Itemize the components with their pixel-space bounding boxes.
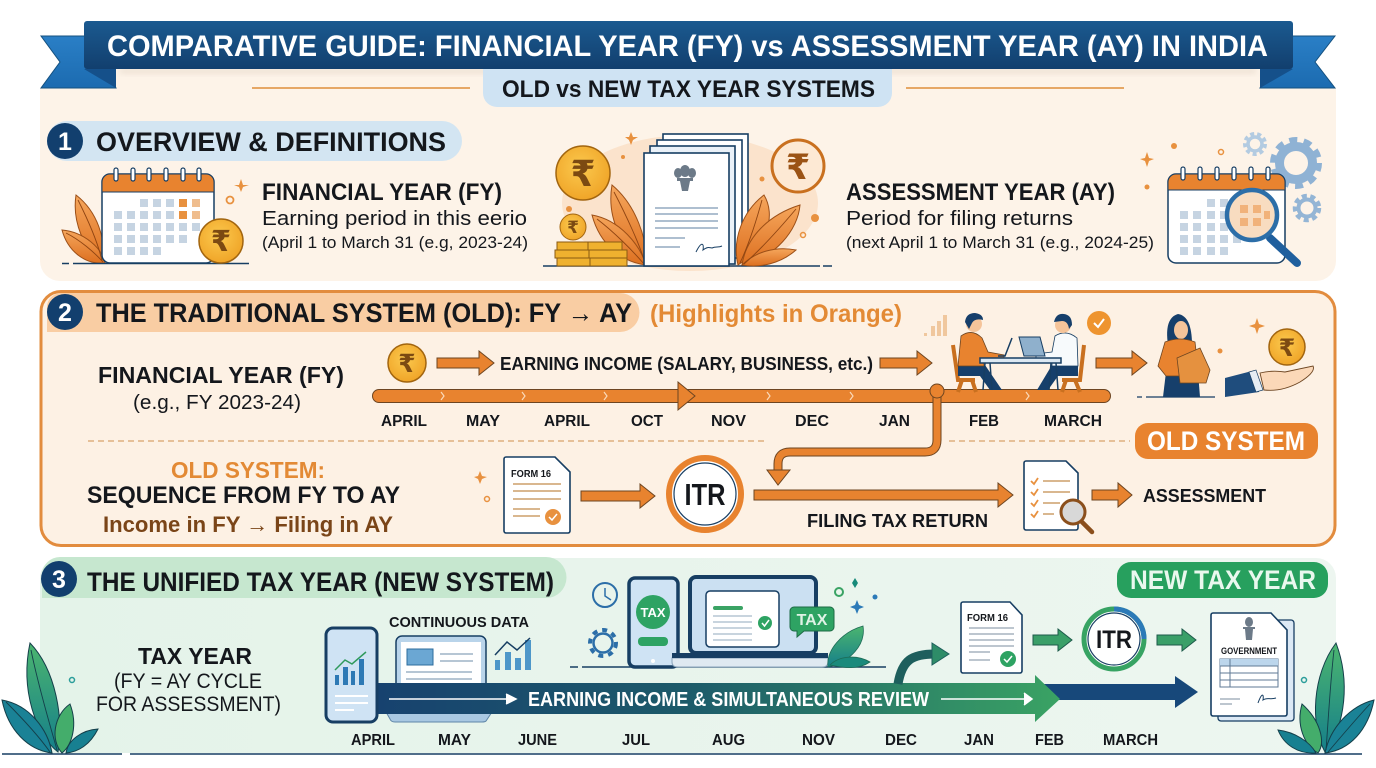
arrow: form 16 to ITR bbox=[581, 484, 655, 508]
front sheet bbox=[644, 153, 729, 266]
sparks bbox=[1140, 143, 1177, 190]
signature bbox=[1258, 695, 1276, 703]
heading pill bbox=[47, 121, 462, 161]
leaves bbox=[828, 626, 870, 668]
sleeve bbox=[1225, 371, 1259, 397]
table head bbox=[1220, 659, 1278, 666]
arrow: form 16 to ITR green bbox=[1033, 629, 1072, 651]
example: (e.g., FY 2023-24) bbox=[133, 392, 301, 414]
illustration: laptop with continuous data bbox=[386, 614, 531, 722]
screen bbox=[401, 642, 481, 692]
badge pill bbox=[1117, 562, 1328, 598]
day grid bbox=[1180, 199, 1241, 255]
illustration: two people at a desk bbox=[924, 311, 1111, 392]
badge text: NEW TAX YEAR bbox=[1130, 565, 1316, 595]
dots bbox=[566, 132, 819, 222]
heading pill bbox=[42, 557, 566, 598]
section 1 heading bbox=[47, 121, 462, 161]
badge: old system bbox=[1135, 423, 1318, 459]
heading text: THE UNIFIED TAX YEAR (NEW SYSTEM) bbox=[87, 567, 554, 597]
green button bbox=[638, 637, 668, 646]
arrow: ITR to assessment document bbox=[754, 483, 1013, 507]
rupee: ₹ bbox=[398, 350, 416, 378]
lines bbox=[969, 628, 1014, 660]
lines bbox=[1043, 481, 1070, 514]
inner ring bbox=[674, 463, 736, 525]
tall leaf bbox=[27, 643, 60, 752]
arrow: to assessment bbox=[1092, 483, 1132, 507]
cycle: (FY = AY CYCLE bbox=[114, 670, 262, 693]
spark bbox=[1249, 318, 1265, 334]
illustration: phone and laptop tax filing bbox=[570, 577, 886, 668]
window lines bbox=[713, 616, 752, 640]
tax circle bbox=[636, 595, 670, 629]
month labels: old system bbox=[381, 413, 1102, 430]
april again: APRIL bbox=[544, 413, 590, 430]
right chair bbox=[1062, 345, 1084, 392]
right leaf bbox=[66, 729, 98, 753]
peach glow bbox=[562, 135, 818, 271]
rings bbox=[1181, 167, 1270, 180]
arrow: meeting to payment bbox=[1096, 351, 1147, 375]
heading text: OVERVIEW & DEFINITIONS bbox=[96, 127, 446, 157]
AY heading: ASSESSMENT YEAR (AY) bbox=[846, 179, 1115, 206]
bubble label: TAX bbox=[797, 612, 828, 629]
icon: rupee coin bbox=[388, 344, 426, 382]
check bbox=[1000, 651, 1016, 667]
icon: ITR ring green bbox=[1084, 609, 1144, 669]
back sheets bbox=[650, 134, 748, 264]
gradient arrow bbox=[377, 675, 1060, 722]
ring bbox=[70, 678, 74, 682]
ground line bbox=[570, 666, 886, 668]
calendar header bbox=[102, 174, 214, 192]
sheet bbox=[1024, 461, 1078, 530]
veins bbox=[6, 650, 57, 752]
check mark bbox=[1094, 319, 1104, 327]
form label: FORM 16 bbox=[967, 613, 1008, 624]
arrow: to meeting bbox=[880, 351, 932, 375]
cuff bbox=[1249, 370, 1263, 392]
ring bbox=[1302, 678, 1306, 682]
outline coin rupee: ₹ bbox=[786, 148, 810, 187]
outline coin bbox=[772, 140, 824, 192]
number badge bbox=[47, 123, 83, 159]
number: 2 bbox=[58, 299, 72, 327]
text block: sequence bbox=[87, 457, 400, 537]
icon: calendar with magnifier and gears bbox=[1140, 134, 1319, 263]
calendar body bbox=[102, 174, 214, 263]
window bbox=[706, 591, 779, 647]
subtitle ribbon bbox=[252, 69, 1124, 107]
white arrow left bbox=[389, 694, 516, 704]
main arrow: earning income and review bbox=[377, 675, 1198, 722]
ground line bbox=[2, 753, 1362, 755]
june: JUNE bbox=[518, 732, 557, 749]
emblem bbox=[1243, 617, 1255, 640]
jul: JUL bbox=[622, 732, 650, 749]
clock bbox=[593, 583, 617, 607]
connector outline bbox=[778, 392, 937, 472]
navy tail arrow bbox=[1040, 676, 1198, 708]
chart bars bbox=[335, 659, 364, 685]
signature bbox=[696, 244, 722, 252]
panel: overview background bbox=[40, 69, 1336, 281]
dec: DEC bbox=[795, 413, 829, 430]
laptop base bbox=[672, 658, 828, 667]
section 2 heading bbox=[47, 293, 902, 332]
icon: checklist with magnifier bbox=[1024, 461, 1092, 532]
middle leaf bbox=[1300, 704, 1321, 753]
panel: traditional system bbox=[41, 292, 1335, 546]
badge pill bbox=[1135, 423, 1318, 459]
ribbon tail left bbox=[41, 36, 116, 88]
phone body bbox=[326, 628, 377, 722]
dec: DEC bbox=[885, 732, 917, 749]
icon: phone with chart bbox=[326, 628, 377, 722]
far right leaf bbox=[1325, 700, 1374, 753]
back sheet bbox=[1218, 620, 1294, 721]
left chair bbox=[953, 345, 976, 392]
footer lines bbox=[1220, 699, 1240, 704]
right person legs bbox=[1037, 365, 1078, 390]
label: EARNING INCOME & SIMULTANEOUS REVIEW bbox=[528, 689, 929, 711]
ring base bbox=[1084, 609, 1144, 669]
right person torso bbox=[1036, 333, 1078, 366]
check mark bbox=[549, 514, 557, 520]
coin bbox=[1269, 329, 1305, 365]
right person head bbox=[1055, 317, 1071, 333]
veins bbox=[1326, 650, 1370, 752]
curve head bbox=[932, 643, 949, 665]
right person hair bbox=[1054, 314, 1072, 329]
bar bbox=[372, 390, 1110, 402]
check badge bbox=[545, 509, 561, 525]
torso bbox=[1158, 339, 1199, 376]
left leaf bbox=[1278, 730, 1316, 753]
ground line bbox=[62, 262, 249, 264]
subtitle rule left bbox=[252, 87, 470, 89]
arrow: to earning income bbox=[437, 351, 494, 375]
small ring bbox=[226, 196, 234, 204]
connector fill bbox=[778, 392, 937, 472]
hair bbox=[1167, 314, 1192, 345]
feb: FEB bbox=[969, 413, 999, 430]
big coin bbox=[556, 146, 610, 200]
spark bbox=[474, 471, 487, 484]
chat check bbox=[1087, 311, 1111, 335]
plant: right bbox=[1278, 643, 1374, 753]
ITR text: ITR bbox=[684, 477, 726, 512]
form label: FORM 16 bbox=[511, 469, 551, 480]
icon: form 16 document bbox=[474, 457, 570, 533]
label: OLD SYSTEM: bbox=[171, 457, 325, 483]
highlight note: (Highlights in Orange) bbox=[650, 300, 902, 328]
top gear bbox=[1245, 134, 1265, 154]
lens cells bbox=[1240, 205, 1270, 226]
illustration: hand receiving coin bbox=[1218, 318, 1313, 397]
sparks bbox=[850, 578, 878, 614]
small coin rupee: ₹ bbox=[567, 218, 579, 237]
number: 3 bbox=[52, 566, 66, 594]
may: MAY bbox=[438, 732, 471, 749]
arrow: curved to form 16 bbox=[898, 643, 949, 684]
text block: tax year bbox=[96, 643, 281, 716]
ribbon folds bbox=[84, 69, 1293, 88]
arrow: connector from FY to AY bbox=[767, 384, 944, 485]
illustration: woman with folder bbox=[1137, 314, 1215, 397]
AY description: Period for filing returns bbox=[846, 208, 1073, 230]
laptop deck bbox=[672, 653, 828, 658]
nov: NOV bbox=[711, 413, 746, 430]
left laptop bbox=[998, 338, 1012, 356]
ring blue arc bbox=[1114, 609, 1144, 639]
badge: new tax year bbox=[1117, 562, 1328, 598]
curve bbox=[898, 654, 935, 684]
coin bbox=[388, 344, 426, 382]
hand bbox=[1260, 366, 1313, 390]
rupee: ₹ bbox=[1279, 335, 1295, 362]
feb: FEB bbox=[1035, 732, 1064, 749]
tall leaf bbox=[1315, 643, 1344, 752]
table bbox=[980, 358, 1061, 390]
ring bbox=[835, 588, 843, 596]
mid arrowhead bbox=[678, 382, 695, 410]
label: CONTINUOUS DATA bbox=[389, 614, 529, 631]
AY dates: (next April 1 to March 31 (e.g., 2024-25) bbox=[846, 233, 1154, 252]
middle leaf bbox=[55, 704, 74, 753]
ribbon tail right bbox=[1260, 36, 1335, 88]
jan: JAN bbox=[879, 413, 910, 430]
icon: form 16 document green bbox=[961, 602, 1022, 673]
folder bbox=[1177, 348, 1210, 383]
icon: document stack with coins bbox=[543, 132, 832, 271]
left leaves bbox=[592, 185, 646, 265]
april: APRIL bbox=[351, 732, 395, 749]
icon: government document bbox=[1211, 613, 1294, 721]
bars bbox=[924, 315, 947, 336]
plant: left bbox=[2, 643, 98, 753]
right leaves bbox=[736, 195, 800, 266]
spark bbox=[234, 179, 249, 192]
icon: ITR ring bbox=[669, 458, 741, 530]
subtitle text: OLD vs NEW TAX YEAR SYSTEMS bbox=[502, 76, 875, 103]
right laptop bbox=[1019, 337, 1045, 356]
calendar header bbox=[1168, 174, 1285, 190]
ground line bbox=[1137, 396, 1215, 398]
gear bbox=[590, 630, 616, 656]
section 3 heading bbox=[41, 557, 566, 598]
march: MARCH bbox=[1044, 413, 1102, 430]
text: assessment: ASSESSMENT bbox=[1143, 486, 1266, 506]
title banner bbox=[41, 21, 1335, 88]
subtitle rule right bbox=[906, 87, 1124, 89]
sequence: SEQUENCE FROM FY TO AY bbox=[87, 482, 400, 509]
chevrons bbox=[441, 392, 1029, 400]
magnifier handle bbox=[1270, 238, 1297, 263]
table rules bbox=[1220, 659, 1278, 687]
aug: AUG bbox=[712, 732, 745, 749]
check mark bbox=[1004, 656, 1012, 662]
text: filing tax return: FILING TAX RETURN bbox=[807, 511, 988, 531]
month labels: new system bbox=[351, 732, 1158, 749]
tax circle label: TAX bbox=[640, 605, 666, 620]
nov: NOV bbox=[802, 732, 835, 749]
ring bbox=[484, 496, 490, 502]
left person torso bbox=[958, 332, 1004, 366]
window accent bbox=[713, 606, 743, 610]
rupee: ₹ bbox=[211, 226, 231, 258]
dots bbox=[1218, 348, 1222, 354]
emblem bbox=[674, 165, 696, 191]
panel: unified tax year bbox=[40, 558, 1336, 753]
number badge bbox=[41, 561, 77, 597]
laptop frame bbox=[396, 636, 486, 696]
leaves bbox=[62, 195, 105, 263]
skirt bbox=[1163, 372, 1200, 397]
home button bbox=[651, 659, 655, 663]
text block: FY label bbox=[98, 362, 344, 414]
number: 1 bbox=[58, 128, 72, 156]
text block: assessment year bbox=[846, 179, 1154, 252]
government label: GOVERNMENT bbox=[1221, 646, 1277, 656]
white arrow right bbox=[941, 693, 1032, 705]
march: MARCH bbox=[1103, 732, 1158, 749]
left person head bbox=[966, 316, 982, 332]
coin bbox=[199, 219, 243, 263]
lines bbox=[335, 696, 368, 710]
label: TAX YEAR bbox=[138, 643, 252, 669]
left leaf veins bbox=[597, 192, 645, 264]
arrow: ITR to government bbox=[1157, 629, 1196, 651]
ring bbox=[800, 232, 806, 238]
FY description: Earning period in this eerio bbox=[262, 208, 527, 230]
heading pill bbox=[47, 293, 639, 332]
front sheet bbox=[1211, 613, 1287, 716]
income to filing: Income in FY → Filing in AY bbox=[103, 512, 393, 537]
small coin bbox=[560, 214, 586, 240]
magnifier lens bbox=[1227, 190, 1277, 240]
assessment: FOR ASSESSMENT) bbox=[96, 693, 281, 716]
sheet bbox=[504, 457, 570, 533]
left person legs bbox=[958, 365, 1002, 390]
lens bbox=[1061, 500, 1085, 524]
lower gear bbox=[1295, 196, 1319, 220]
chart bbox=[495, 640, 531, 670]
connector head bbox=[767, 470, 790, 485]
clock hands bbox=[605, 588, 611, 600]
table bbox=[1220, 659, 1278, 687]
check bbox=[758, 616, 772, 630]
number badge bbox=[47, 294, 83, 330]
calendar body bbox=[1168, 174, 1285, 263]
FY heading: FINANCIAL YEAR (FY) bbox=[262, 179, 502, 206]
trend bbox=[335, 652, 366, 670]
right leaf veins bbox=[740, 200, 796, 264]
screen block bbox=[407, 649, 433, 665]
title: COMPARATIVE GUIDE: FINANCIAL YEAR (FY) vs ASSESSMENT YEAR (AY) IN INDIA bbox=[107, 30, 1268, 63]
ground line bbox=[543, 265, 832, 267]
small ring bbox=[1218, 150, 1224, 154]
rings bbox=[114, 168, 201, 181]
face bbox=[1174, 321, 1188, 339]
label: FINANCIAL YEAR (FY) bbox=[98, 362, 344, 388]
document lines bbox=[655, 208, 718, 247]
handle bbox=[1082, 522, 1092, 532]
text: earning income: EARNING INCOME (SALARY, BUSINESS, etc.) bbox=[500, 354, 873, 374]
outer ring bbox=[669, 458, 741, 530]
large gear bbox=[1273, 140, 1319, 186]
jan: JAN bbox=[964, 732, 994, 749]
inner ring bbox=[1088, 613, 1140, 665]
big coin rupee: ₹ bbox=[570, 153, 596, 194]
april: APRIL bbox=[381, 413, 427, 430]
may: MAY bbox=[466, 413, 500, 430]
icon: calendar with coin bbox=[62, 168, 249, 264]
leaf veins bbox=[66, 200, 103, 262]
left person hair bbox=[965, 313, 983, 329]
lines bbox=[513, 484, 561, 516]
subtitle pill bbox=[483, 69, 892, 107]
sheet bbox=[961, 602, 1022, 673]
banner body bbox=[84, 21, 1293, 69]
phone body bbox=[629, 578, 678, 667]
connector node bbox=[930, 384, 944, 398]
ITR text: ITR bbox=[1096, 626, 1132, 654]
text block: financial year bbox=[262, 179, 528, 252]
FY dates: (April 1 to March 31 (e.g, 2023-24) bbox=[262, 233, 528, 252]
heading text: THE TRADITIONAL SYSTEM (OLD): FY → AY bbox=[96, 298, 632, 328]
trend bbox=[495, 638, 530, 655]
check rows bbox=[1031, 478, 1038, 517]
timeline bar bbox=[372, 382, 1110, 410]
day grid bbox=[114, 199, 200, 255]
laptop frame bbox=[690, 577, 816, 653]
tax bubble bbox=[790, 607, 834, 637]
check mark bbox=[762, 620, 769, 626]
coin stacks bbox=[555, 242, 627, 266]
left leaf bbox=[2, 700, 52, 753]
oct: OCT bbox=[631, 413, 663, 430]
laptop base bbox=[386, 712, 492, 722]
screen lines bbox=[406, 654, 473, 679]
badge text: OLD SYSTEM bbox=[1147, 426, 1305, 456]
